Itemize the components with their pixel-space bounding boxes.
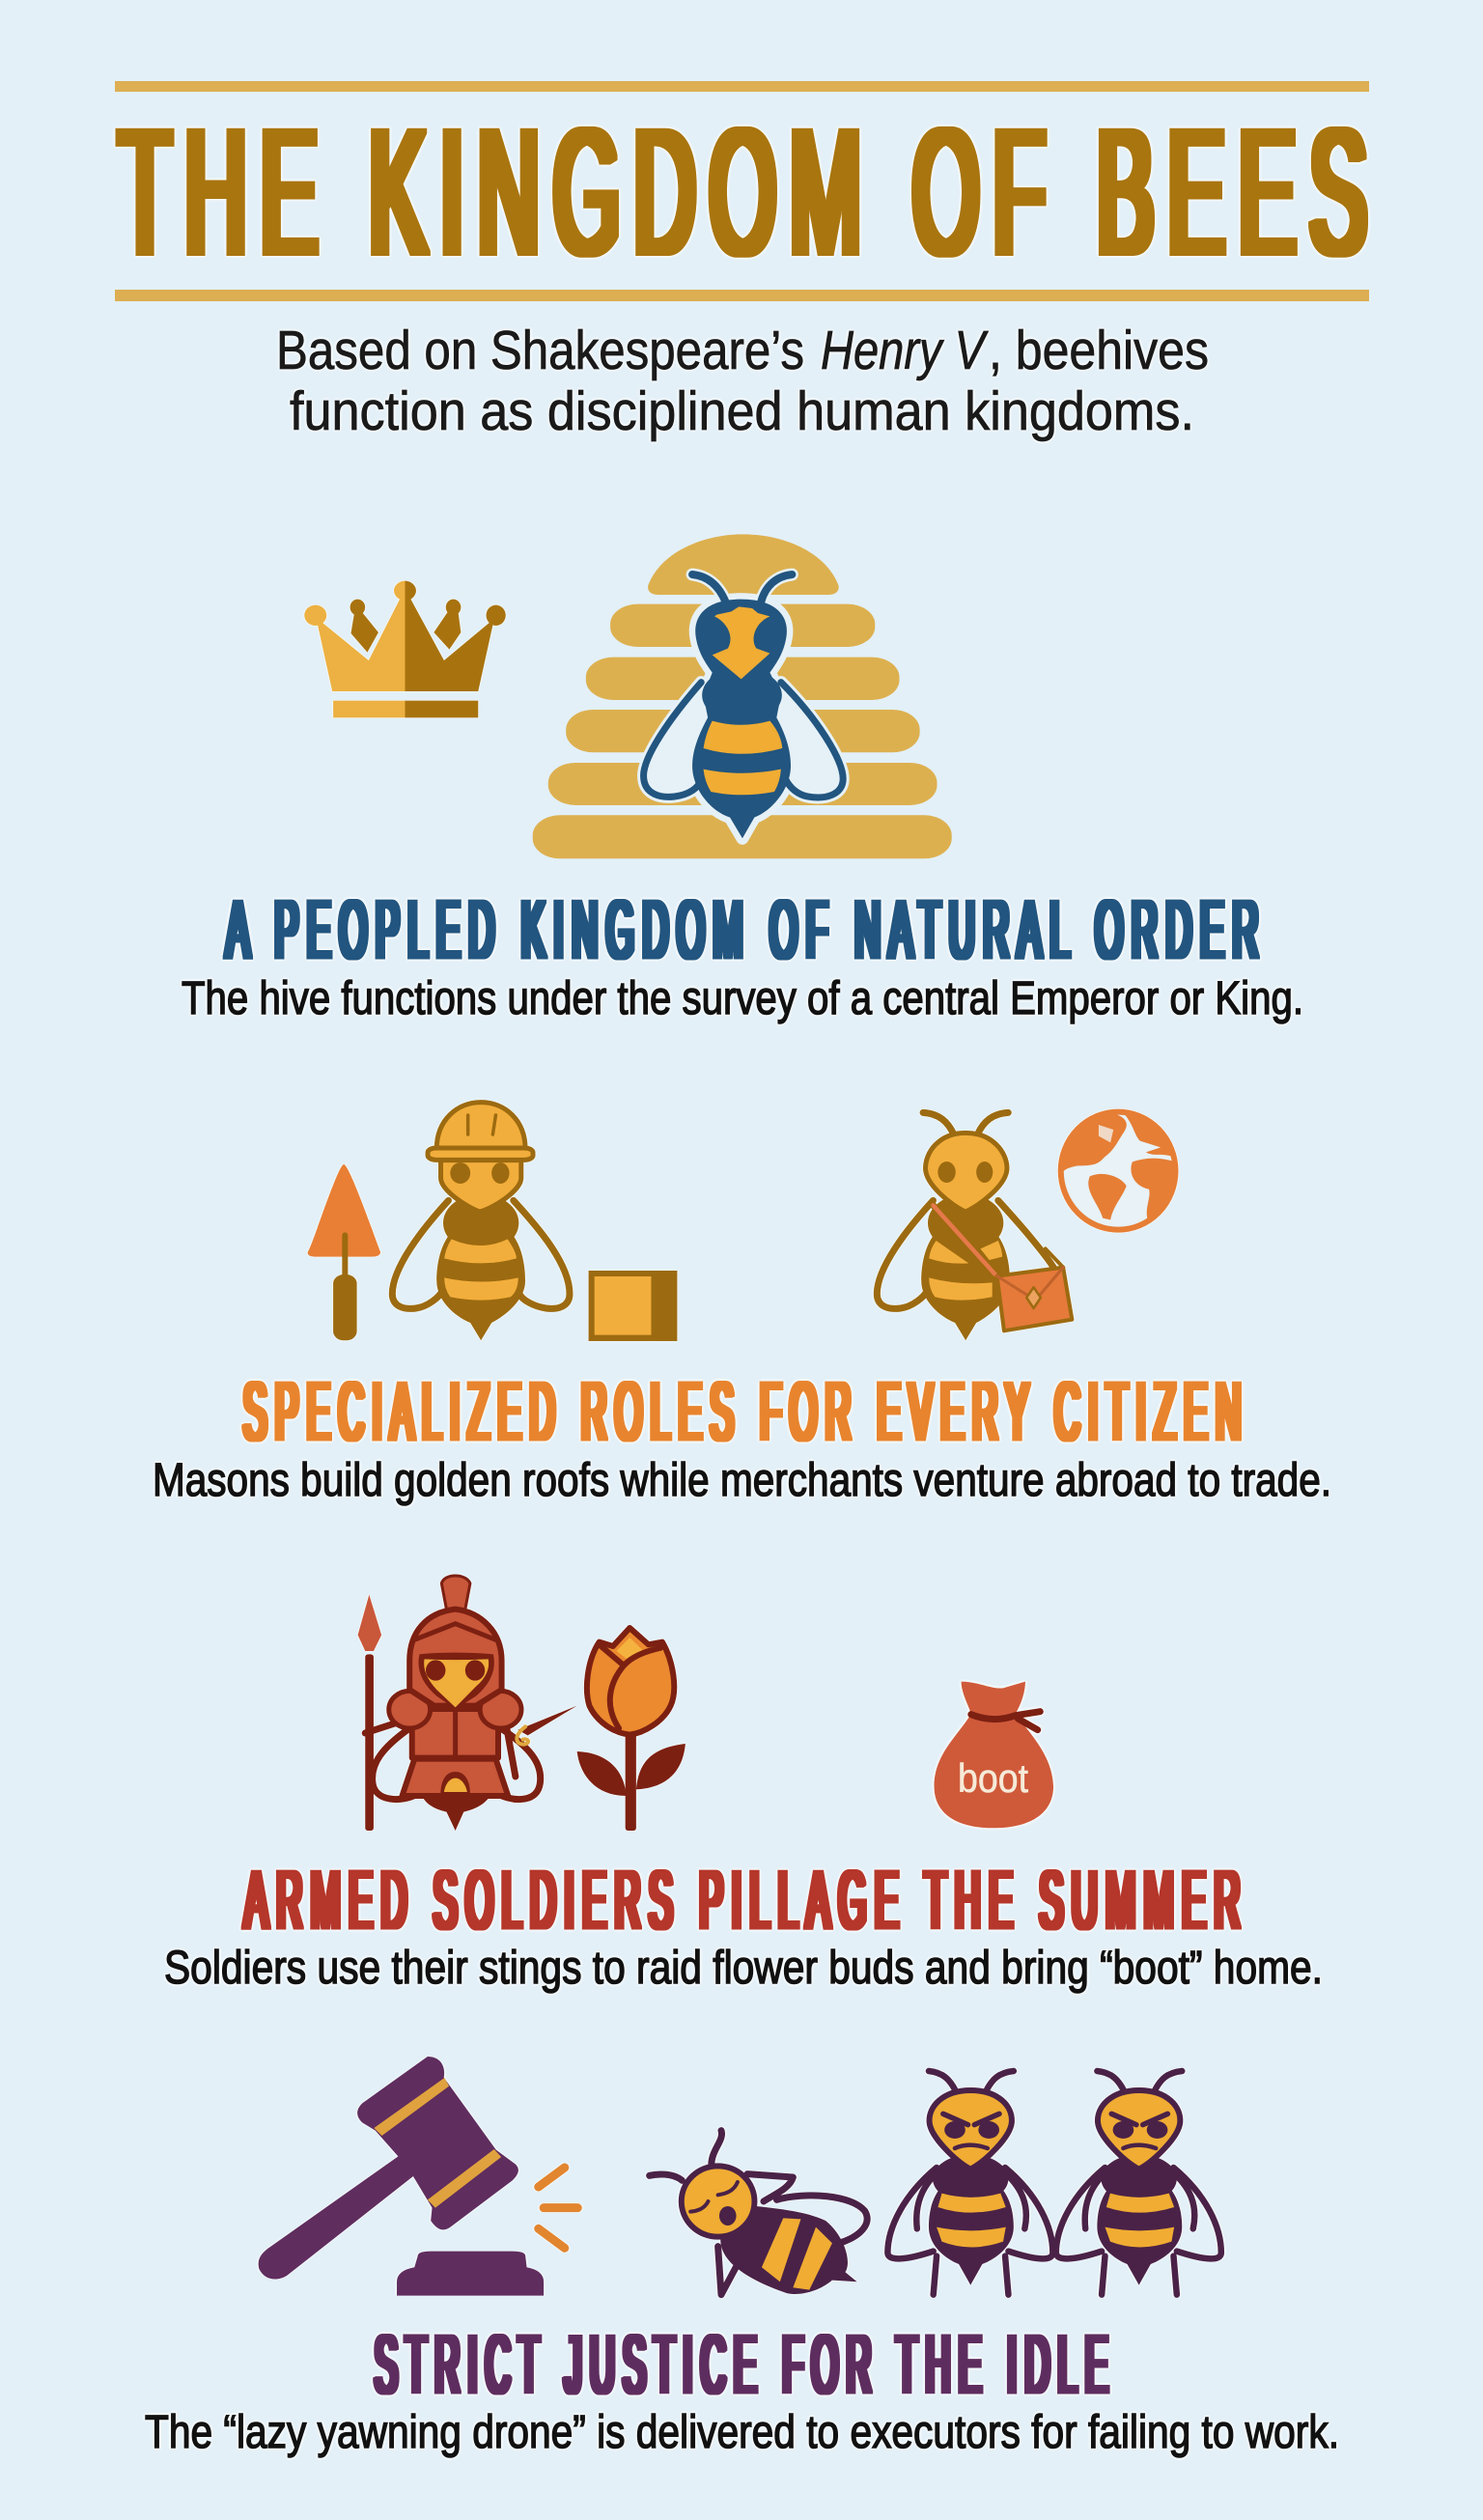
icon: gavel (259, 2057, 577, 2296)
bee face and stripes (704, 606, 782, 795)
subtitle: , beehives (989, 320, 1209, 381)
icon: boot sack: boot (958, 1755, 1028, 1801)
icon: beehive with royal bee (533, 534, 952, 858)
icon: tulip (577, 1628, 686, 1831)
icon: crown (304, 581, 506, 717)
icon: merchant group (877, 1112, 1176, 1340)
wings and arms (365, 1719, 541, 1800)
executioner bee 1 (887, 2071, 1052, 2295)
mason bee (392, 1103, 570, 1340)
bee wings (644, 683, 701, 797)
subtitle: Based on Shakespeare’s (276, 320, 804, 381)
icon: mason group (308, 1103, 677, 1341)
bee body (692, 574, 792, 838)
hive tiers (533, 534, 952, 858)
icon: angry executioner bees (887, 2071, 1221, 2295)
helmet (441, 1576, 470, 1610)
subtitle: function as disciplined human kingdoms. (290, 380, 1194, 442)
strike marks (539, 2168, 577, 2248)
text: section 1: The hive functions under the survey of a central Emperor or King. (182, 973, 1303, 1024)
icon: boot sack (935, 1682, 1053, 1828)
brick (589, 1271, 677, 1341)
icon: yawning drone (650, 2131, 867, 2295)
subtitle: Henry V (821, 320, 989, 381)
executioner bee 2 (1056, 2071, 1221, 2295)
bee halo (644, 574, 843, 838)
bottom rule (115, 290, 1369, 301)
globe (1061, 1112, 1176, 1230)
sound block (397, 2252, 544, 2296)
stinger (518, 1706, 577, 1735)
icon: soldier bee with spear (358, 1576, 577, 1831)
satchel (933, 1205, 1072, 1330)
trowel (308, 1164, 380, 1257)
merchant bee (877, 1112, 1057, 1340)
armour (412, 1709, 498, 1758)
subtitle (276, 320, 1209, 442)
top rule (115, 81, 1369, 92)
spear (358, 1595, 381, 1651)
